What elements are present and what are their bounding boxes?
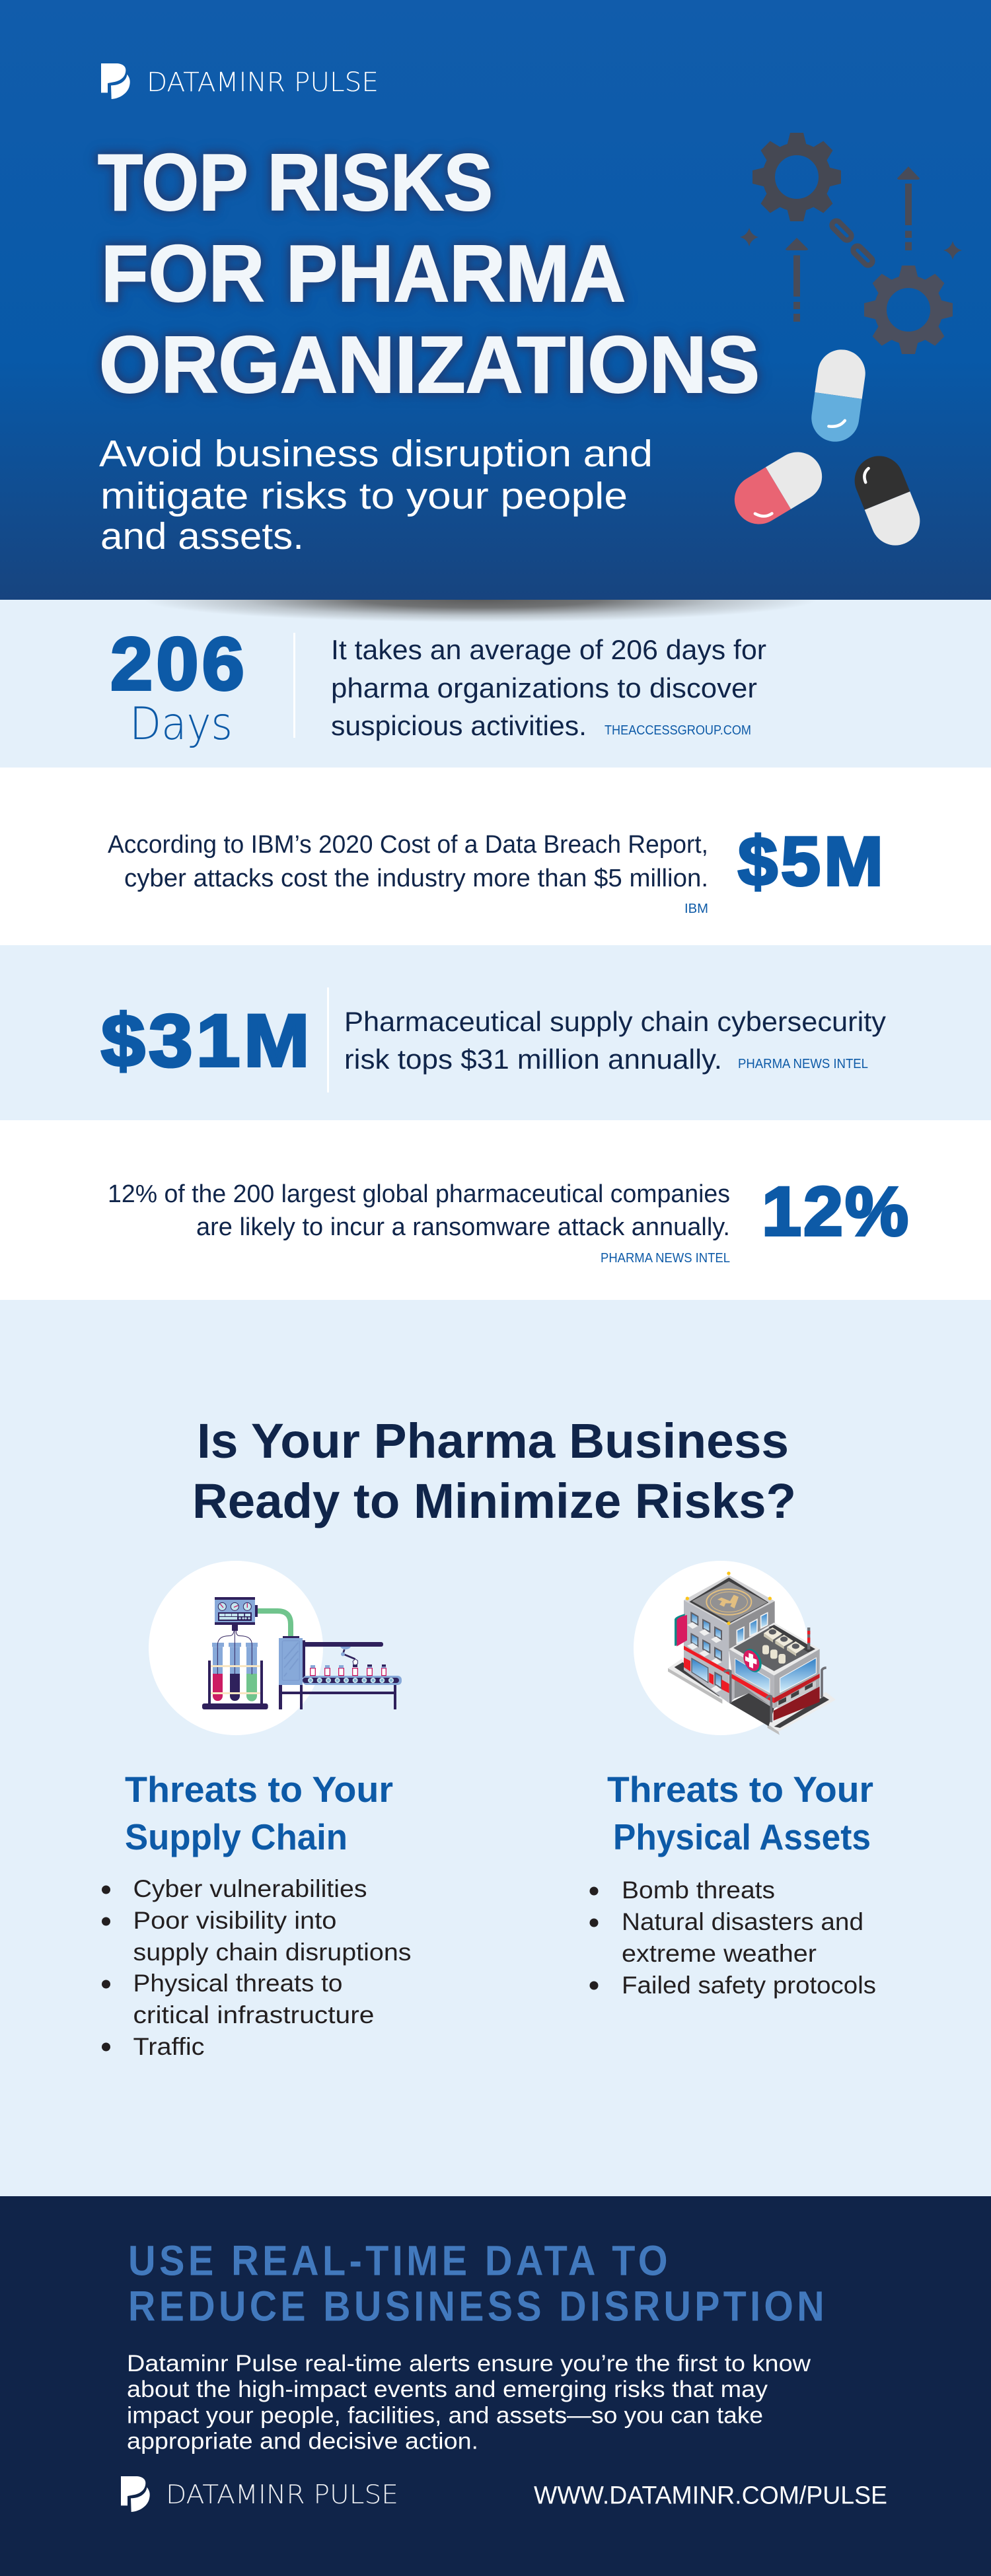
source: THEACCESSGROUP.COM: [605, 723, 751, 738]
stat text: suspicious activities.: [331, 710, 587, 741]
tube rack: [211, 1665, 260, 1667]
stat text: Pharmaceutical supply chain cybersecurity: [344, 1006, 886, 1037]
panel: stat 206 days: [111, 600, 799, 748]
logo wordmark: DATAMINR PULSE: [166, 2480, 398, 2510]
source: IBM: [684, 902, 708, 916]
subtitle: Avoid business disruption and: [99, 433, 653, 475]
heading: footer: REDUCE BUSINESS DISRUPTION: [128, 2283, 828, 2330]
stat unit: Days: [129, 698, 233, 750]
lower wing left face: [729, 1649, 774, 1709]
tower left face: [684, 1600, 729, 1703]
robot arm: [340, 1647, 351, 1649]
tower right face: [729, 1601, 775, 1651]
machine legs: [279, 1640, 396, 1709]
header drop shadow: [161, 600, 799, 621]
logo: Dataminr Pulse footer: [121, 2476, 398, 2512]
icon: sparkle right: [943, 241, 962, 260]
stat number: $5M: [738, 823, 887, 900]
roof beacons: [686, 1571, 772, 1625]
illustration: pharma production line: [149, 1561, 402, 1735]
wires: [217, 1631, 252, 1674]
bottles: [311, 1668, 386, 1676]
stat text: It takes an average of 206 days for: [331, 634, 766, 665]
stat number: 12%: [762, 1173, 910, 1250]
list: supply chain threats: Poor visibility into: [133, 1907, 337, 1934]
tower red bands: [684, 1646, 730, 1676]
machine cabinet: [279, 1638, 303, 1685]
source: PHARMA NEWS INTEL: [738, 1057, 868, 1071]
text: footer body: about the high-impact events and emerging risks that may: [127, 2377, 768, 2402]
garage floor: [729, 1693, 774, 1726]
stat text: 12% of the 200 largest global pharmaceutical companies: [108, 1180, 730, 1208]
icon: sparkle left: [740, 228, 758, 246]
icon: pills: [725, 347, 928, 553]
text: footer body: impact your people, facilities, and assets—so you can take: [127, 2403, 763, 2428]
lower wing roof: [729, 1623, 820, 1676]
text: footer body: [127, 2351, 811, 2454]
subtitle: and assets.: [100, 515, 304, 557]
stat text: [108, 831, 708, 892]
icon: right dashed arrow: [897, 166, 920, 250]
panel: stat $31M: [0, 945, 991, 1120]
heading: readiness: Ready to Minimize Risks?: [192, 1474, 796, 1528]
green pipe: [258, 1611, 291, 1636]
right sidewalk: [768, 1692, 836, 1732]
panel: header background: [0, 0, 991, 600]
heading: threats to supply chain: Supply Chain: [125, 1816, 348, 1857]
helipad: [706, 1589, 751, 1615]
stat text: cyber attacks cost the industry more than $5 million.: [124, 865, 708, 892]
panel: footer background: [0, 2196, 991, 2576]
source: PHARMA NEWS INTEL: [601, 1251, 730, 1266]
tower roof: [684, 1575, 775, 1626]
list: supply chain threats: supply chain disruptions: [133, 1939, 411, 1966]
title: ORGANIZATIONS: [99, 320, 760, 410]
logo wordmark: DATAMINR PULSE: [147, 67, 379, 98]
icon: Dataminr P mark: [121, 2476, 150, 2512]
text: footer body: Dataminr Pulse real-time alerts ensure you’re the first to know: [127, 2351, 811, 2377]
list: physical asset threats: [589, 1877, 876, 1999]
icon: blue pill: [809, 347, 868, 445]
subtitle: [99, 433, 653, 557]
chimney: [807, 1628, 810, 1649]
heading: threats to physical assets: Threats to Your: [607, 1769, 873, 1810]
list: supply chain threats: Physical threats to: [133, 1970, 342, 1997]
heading: readiness: [192, 1413, 796, 1528]
stat number: $31M: [101, 999, 313, 1082]
list: physical asset threats: Natural disasters and: [622, 1908, 863, 1935]
panel: readiness section: [0, 1300, 991, 2196]
title: [98, 137, 760, 410]
list: supply chain threats: critical infrastructure: [133, 2001, 374, 2028]
wing windows: [735, 1659, 770, 1693]
icon: lower gear: [864, 266, 953, 354]
stat text: According to IBM’s 2020 Cost of a Data Breach Report,: [108, 831, 708, 859]
test tubes: [212, 1643, 258, 1674]
lower wing right face: [774, 1649, 820, 1709]
list: supply chain threats: Traffic: [133, 2033, 205, 2060]
text: website URL: WWW.DATAMINR.COM/PULSE: [534, 2482, 887, 2510]
list: physical asset threats: Bomb threats: [622, 1877, 775, 1904]
divider: [327, 987, 329, 1092]
panel: stat $5M: [0, 768, 991, 945]
lamp posts: [724, 1668, 826, 1722]
stat text: pharma organizations to discover: [331, 672, 757, 703]
stat text: risk tops $31 million annually.: [344, 1044, 722, 1075]
panel: stat 12%: [0, 1120, 991, 1300]
text: footer body: appropriate and decisive action.: [127, 2428, 478, 2454]
stat text: [344, 1006, 886, 1075]
stat number: 206: [110, 622, 248, 705]
conveyor belt: [303, 1676, 402, 1685]
tower door window: [692, 1659, 708, 1682]
list: physical asset threats: Failed safety protocols: [622, 1972, 876, 1999]
stat text: [331, 634, 766, 741]
heading: threats to supply chain: Threats to Your: [125, 1769, 393, 1810]
list: physical asset threats: extreme weather: [622, 1940, 817, 1967]
icon: red pill: [725, 443, 831, 533]
logo: Dataminr Pulse header: [101, 63, 379, 99]
heading: threats to supply chain: [125, 1769, 393, 1857]
stat text: are likely to incur a ransomware attack annually.: [196, 1213, 730, 1241]
heading: footer: USE REAL-TIME DATA TO: [128, 2236, 671, 2284]
hospital cross sign: [740, 1646, 765, 1675]
wing red bands: [731, 1673, 774, 1703]
stat text: [108, 1180, 730, 1241]
icon: chain links: [830, 219, 874, 267]
air conditioning units: [764, 1628, 805, 1656]
icon: Dataminr P mark: [101, 63, 130, 99]
tower left windows: [691, 1613, 721, 1688]
icon: upper gear: [752, 133, 841, 221]
heading: readiness: Is Your Pharma Business: [197, 1413, 789, 1468]
icon: left dashed arrow: [786, 238, 808, 322]
title: FOR PHARMA: [101, 229, 626, 318]
banner sign: [675, 1614, 685, 1646]
heading: threats to physical assets: Physical Assets: [613, 1816, 871, 1857]
divider: [293, 633, 295, 738]
left sidewalk: [668, 1659, 731, 1699]
illustration: hospital building: [634, 1561, 836, 1735]
list: supply chain threats: [102, 1875, 411, 2060]
list: supply chain threats: Cyber vulnerabilities: [133, 1875, 367, 1902]
tower right windows: [737, 1613, 768, 1643]
control box: [215, 1597, 255, 1625]
title: TOP RISKS: [98, 137, 493, 227]
tower window ledges: [687, 1622, 721, 1693]
icon: black pill: [847, 448, 928, 553]
heading: threats to physical assets: [607, 1769, 873, 1857]
heading: footer: [128, 2236, 828, 2330]
subtitle: mitigate risks to your people: [100, 475, 628, 517]
icon: gears, chain and arrows: [740, 133, 962, 354]
